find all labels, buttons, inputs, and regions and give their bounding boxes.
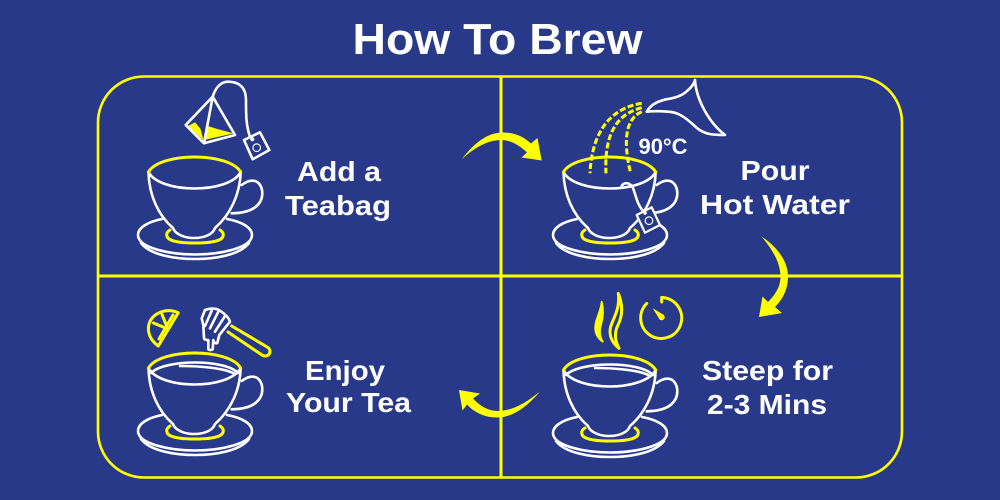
label: steep for 2-3 mins: Steep for (702, 355, 833, 386)
panel: step 1 add a teabag (138, 82, 391, 259)
label: steep for 2-3 mins: 2-3 Mins (707, 389, 827, 420)
icon: water streams (590, 103, 642, 173)
icon: honey dipper (202, 309, 270, 356)
label: pour hot water: Pour (740, 155, 810, 186)
arrow: step 2 to step 3 (759, 236, 788, 317)
icon: steam (595, 293, 622, 348)
label: enjoy your tea: Your Tea (286, 387, 411, 418)
icon: full teacup (553, 355, 677, 457)
title: How To Brew (352, 15, 643, 64)
label: add a teabag: Add a (297, 156, 381, 187)
label: pour hot water: Hot Water (700, 189, 850, 220)
icon: timer (641, 298, 682, 338)
panel: step 3 steep (553, 293, 833, 457)
icon: pouring kettle spout (647, 80, 725, 135)
panel: step 2 pour hot water (553, 80, 850, 259)
label: enjoy your tea (286, 355, 411, 418)
icon: teacup (138, 157, 262, 259)
icon: teabag (186, 82, 269, 159)
arrow: step 3 to step 4 (459, 390, 540, 418)
icon: lemon slice (148, 311, 178, 346)
label: steep for 2-3 mins (702, 355, 833, 420)
panel: step 4 enjoy (138, 309, 411, 455)
label: add a teabag (285, 156, 391, 221)
label: enjoy your tea: Enjoy (305, 355, 385, 386)
label: temperature: 90°C (638, 134, 688, 159)
arrow: step 1 to step 2 (462, 132, 542, 160)
label: add a teabag: Teabag (285, 190, 391, 221)
icon: teacup with teabag (553, 157, 677, 259)
icon: full teacup (138, 353, 262, 455)
rounded frame with quadrant dividers (98, 76, 902, 478)
label: pour hot water (700, 155, 850, 220)
